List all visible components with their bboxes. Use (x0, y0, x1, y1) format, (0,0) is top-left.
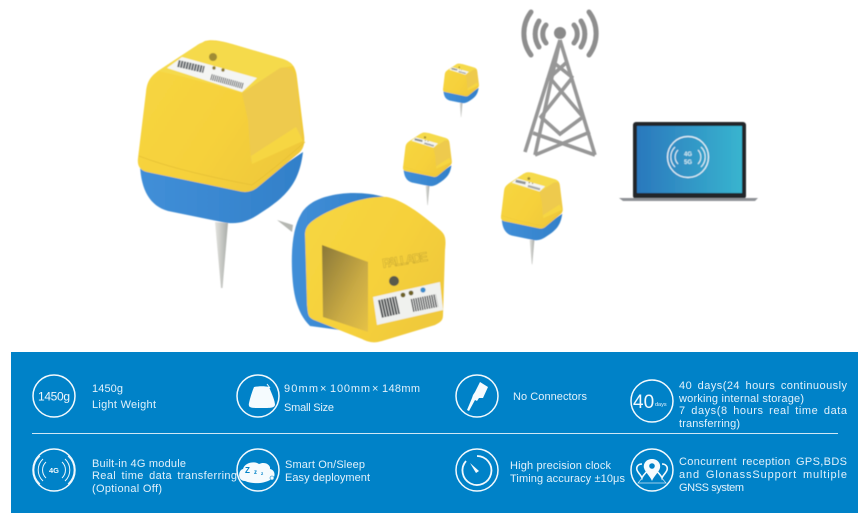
laptop screen badge (668, 136, 708, 178)
spec: clock (456, 449, 626, 491)
small sensor node: right (501, 172, 563, 264)
spec: smart sleep (237, 449, 370, 491)
spec: weight: 1450g (92, 383, 123, 395)
small sensor node: middle (403, 132, 452, 205)
panel: specifications (11, 352, 858, 513)
spec: GNSS: Concurrent reception GPS,BDS (679, 456, 847, 468)
spec: battery life: 7 days(8 hours real time data (679, 405, 848, 417)
spec: smart sleep: z (261, 471, 264, 476)
spec: no connectors: No Connectors (513, 391, 588, 403)
spec: size: 148mm (382, 383, 420, 395)
spec: smart sleep: Smart On/Sleep (285, 459, 365, 471)
spec: 4G module: (Optional Off) (92, 483, 162, 495)
spec: size: × (372, 383, 378, 395)
spec: 4G module: Built-in 4G module (92, 458, 186, 470)
spec: size (237, 375, 420, 417)
spec: battery life: 40 (633, 392, 654, 413)
laptop screen badge: 5G (684, 160, 692, 166)
spec: GNSS: GNSS system (679, 482, 744, 494)
icon: cell tower (524, 12, 596, 155)
spec: GNSS: and GlonassSupport multiple (679, 469, 847, 481)
spec: no connectors (456, 375, 588, 417)
spec: clock: Timing accuracy ±10μs (510, 473, 626, 485)
large sensor node with spike (138, 40, 305, 288)
laptop (619, 122, 758, 201)
spec: battery life: days (655, 402, 667, 408)
spec: smart sleep: Easy deployment (285, 472, 370, 484)
spec: battery life (631, 380, 848, 430)
small sensor node: far (443, 64, 479, 117)
spec: battery life: working internal storage) (678, 393, 804, 405)
spec: clock: High precision clock (510, 460, 612, 472)
rear-view sensor node (277, 193, 445, 342)
spec: size: Small Size (284, 402, 334, 414)
spec: size: 90mm (284, 383, 318, 395)
spec: 4G module: 4G (49, 466, 59, 475)
spec: weight (33, 375, 156, 417)
laptop screen badge: 4G (684, 152, 692, 158)
spec: 4G module: Real time data transferring (92, 470, 237, 482)
spec: weight: Light Weight (92, 399, 156, 411)
embossed logo: PALLADE (381, 249, 429, 271)
spec: size: 100mm (330, 383, 370, 395)
spec: size: × (320, 383, 326, 395)
spec: battery life: transferring) (679, 418, 740, 430)
spec: smart sleep: z (254, 470, 257, 476)
spec: weight: 1450g (38, 390, 70, 404)
spec: battery life: 40 days(24 hours continuously (679, 380, 848, 392)
spec: smart sleep: Z (245, 466, 250, 475)
spec: 4G module (33, 449, 237, 495)
spec: GNSS (631, 449, 847, 494)
